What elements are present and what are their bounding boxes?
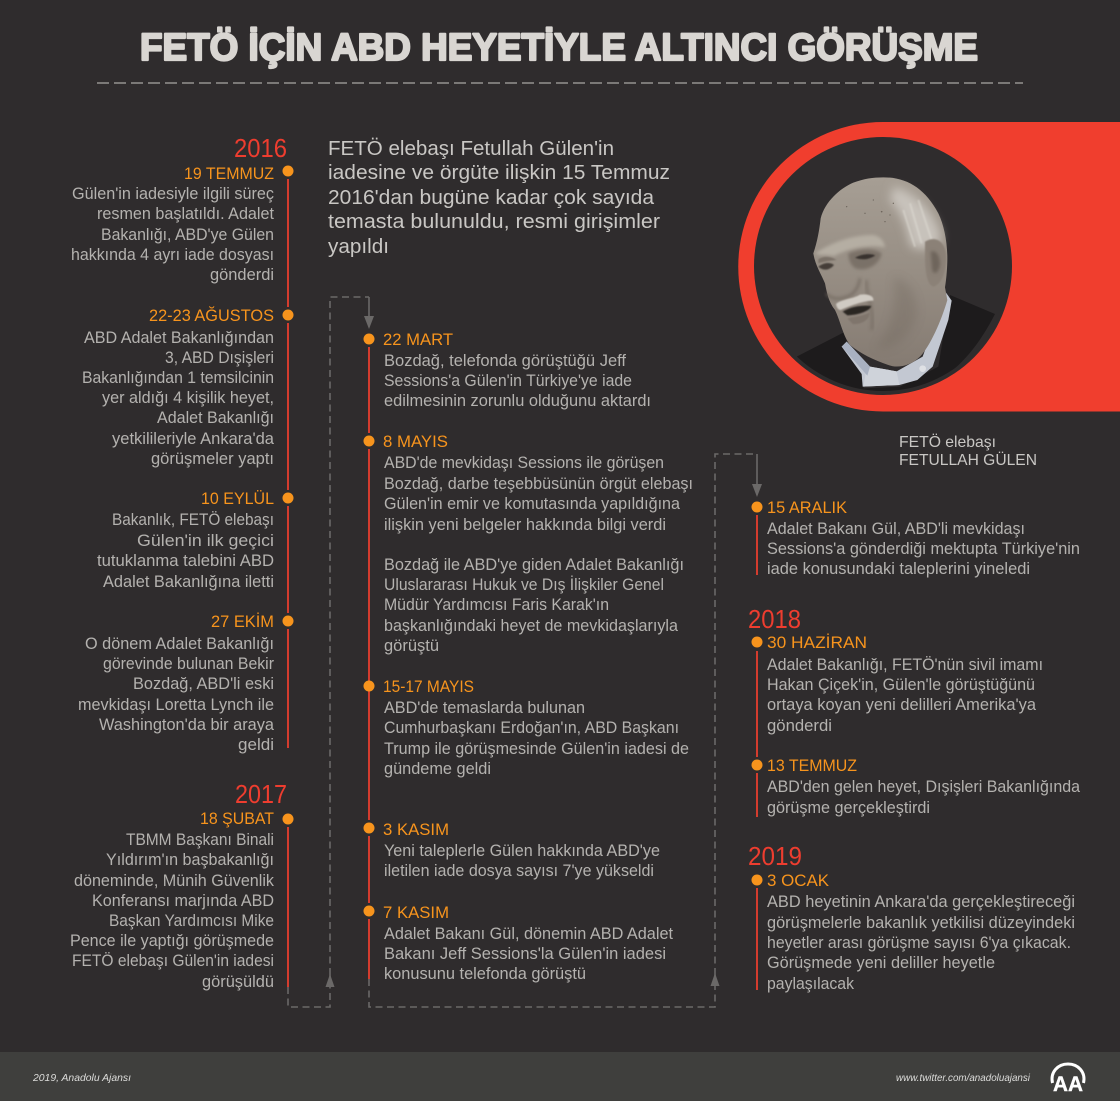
event: 3 Kasım: Yeni taleplerle Gülen hakkında ABD'ye — [384, 842, 660, 860]
event: 15-17 Mayıs: gündeme geldi — [384, 760, 491, 778]
event: 27 Ekim: geldi — [238, 736, 274, 754]
year: 2017: 2017 — [235, 781, 287, 809]
event: 19 Temmuz: Gülen'in iadesiyle ilgili süreç — [72, 185, 274, 203]
event: 27 Ekim: Bozdağ, ABD'li eski — [133, 675, 274, 693]
event: 22-23 Ağustos: 22-23 AĞUSTOS — [149, 306, 274, 325]
event: 22 Mart: Bozdağ, telefonda görüştüğü Jeff — [384, 352, 626, 370]
event: 8 Mayıs: Gülen'in emir ve komutasında yapıldığına — [384, 495, 681, 513]
event: 8 Mayıs: görüştü — [384, 637, 439, 655]
event: 27 Ekim: O dönem Adalet Bakanlığı — [85, 635, 274, 653]
event: 8 Mayıs: Bozdağ, darbe teşebbüsünün örgüt elebaşı — [384, 475, 693, 493]
event: 8 Mayıs: Müdür Yardımcısı Faris Karak'ın — [384, 596, 609, 614]
event: 22-23 Ağustos: 3, ABD Dışişleri — [165, 349, 274, 367]
event: 10 Eylül: 10 EYLÜL — [201, 489, 274, 508]
event: 27 Ekim — [78, 612, 275, 754]
event: 27 Ekim: mevkidaşı Loretta Lynch ile — [78, 696, 274, 714]
event: 7 Kasım: 7 KASIM — [383, 903, 449, 922]
footer twitter address: www.twitter.com/anadoluajansi — [896, 1072, 1031, 1084]
caption: portrait name: FETULLAH GÜLEN — [899, 451, 1037, 469]
event: 15 Aralık: Sessions'a gönderdiği mektupta Türkiye'nin — [767, 540, 1080, 558]
event: 7 Kasım: konusunu telefonda görüştü — [384, 965, 586, 983]
event: 27 Ekim: 27 EKİM — [211, 612, 274, 631]
event: 7 Kasım — [383, 903, 673, 983]
event: 7 Kasım: Bakanı Jeff Sessions'la Gülen'in iadesi — [384, 945, 666, 963]
event: 8 Mayıs: Bozdağ ile ABD'ye giden Adalet Bakanlığı — [384, 556, 684, 574]
event: 18 Şubat: 18 ŞUBAT — [200, 809, 274, 828]
intro text: FETÖ elebaşı Fetullah Gülen'in — [328, 138, 614, 160]
event: 3 Ocak: paylaşılacak — [767, 975, 855, 993]
event: 22-23 Ağustos: Bakanlığından 1 temsilcinin — [82, 369, 274, 387]
event: 8 Mayıs: başkanlığındaki heyet de mevkidaşlarıyla — [384, 617, 679, 635]
event: 22-23 Ağustos: görüşmeler yaptı — [151, 450, 274, 468]
footer bar — [0, 1052, 1120, 1101]
event: 19 Temmuz — [71, 164, 274, 284]
event: 3 Kasım — [383, 820, 660, 880]
event: 18 Şubat: TBMM Başkanı Binali — [126, 831, 274, 849]
event: 15 Aralık — [767, 498, 1080, 578]
event: 10 Eylül — [97, 489, 274, 591]
event: 3 Kasım: 3 KASIM — [383, 820, 449, 839]
intro text: 2016'dan bugüne kadar çok sayıda — [328, 187, 655, 209]
event: 10 Eylül: Adalet Bakanlığına iletti — [103, 573, 274, 591]
icon: Anadolu Ajansı logo — [1052, 1064, 1084, 1096]
event: 3 Kasım: iletilen iade dosya sayısı 7'ye yükseldi — [384, 862, 654, 880]
intro text — [328, 138, 670, 258]
event: 8 Mayıs: 8 MAYIS — [383, 432, 448, 451]
timeline line: right column — [752, 502, 762, 990]
event: 19 Temmuz: 19 TEMMUZ — [184, 164, 274, 183]
event: 15-17 Mayıs: 15-17 MAYIS — [383, 677, 474, 696]
panel: red portrait banner — [738, 122, 1120, 412]
event: 18 Şubat: Yıldırım'ın başbakanlığı — [106, 851, 274, 869]
event: 13 Temmuz — [767, 756, 1081, 817]
event: 15 Aralık: iade konusundaki taleplerini yineledi — [767, 560, 1030, 578]
event: 30 Haziran: ortaya koyan yeni delilleri Amerika'ya — [767, 696, 1037, 714]
event: 15 Aralık: Adalet Bakanı Gül, ABD'li mevkidaşı — [767, 520, 1025, 538]
event: 10 Eylül: Bakanlık, FETÖ elebaşı — [112, 511, 274, 529]
event: 18 Şubat: Başkan Yardımcısı Mike — [109, 912, 274, 930]
event: 15-17 Mayıs: Trump ile görüşmesinde Gülen'in iadesi de — [384, 740, 689, 758]
event: 18 Şubat: Konferansı marjında ABD — [92, 892, 274, 910]
event: 8 Mayıs: ilişkin yeni belgeler hakkında bilgi verdi — [384, 516, 666, 534]
event: 18 Şubat: görüşüldü — [202, 973, 274, 991]
event: 27 Ekim: Washington'da bir araya — [99, 716, 275, 734]
event: 3 Ocak — [767, 871, 1075, 993]
event: 7 Kasım: Adalet Bakanı Gül, dönemin ABD Adalet — [384, 925, 673, 943]
event: 30 Haziran: gönderdi — [767, 717, 832, 735]
text block: right column, 2018 and 2019 — [748, 498, 1081, 993]
event: 13 Temmuz: görüşme gerçekleştirdi — [767, 799, 930, 817]
event: 30 Haziran: Hakan Çiçek'in, Gülen'le görüştüğünü — [767, 676, 1035, 694]
event: 15-17 Mayıs — [383, 677, 689, 778]
intro text: temasta bulunuldu, resmi girişimler — [328, 211, 660, 233]
event: 18 Şubat: döneminde, Münih Güvenlik — [74, 872, 275, 890]
event: 3 Ocak: ABD heyetinin Ankara'da gerçekleştireceği — [767, 893, 1075, 911]
intro text: yapıldı — [328, 236, 389, 258]
timeline line: middle column — [364, 334, 720, 1007]
event: 22-23 Ağustos: Adalet Bakanlığı — [157, 409, 274, 427]
event: 19 Temmuz: gönderdi — [210, 266, 274, 284]
event: 3 Ocak: heyetler arası görüşme sayısı 6'ya çıkacak. — [767, 934, 1071, 952]
text block: left column, 2016 and 2017 — [70, 135, 287, 991]
event: 22 Mart: 22 MART — [383, 330, 453, 349]
event: 15 Aralık: 15 ARALIK — [767, 498, 847, 517]
event: 3 Ocak: görüşmelerle bakanlık yetkilisi düzeyindeki — [767, 914, 1075, 932]
year: 2019: 2019 — [748, 843, 802, 871]
event: 3 Ocak: 3 OCAK — [767, 871, 829, 890]
year: 2018: 2018 — [748, 606, 801, 634]
event: 22-23 Ağustos — [82, 306, 275, 468]
caption: portrait name: FETÖ elebaşı — [899, 433, 996, 451]
event: 10 Eylül: tutuklanma talebini ABD — [97, 552, 274, 570]
intro text: iadesine ve örgüte ilişkin 15 Temmuz — [328, 162, 670, 184]
footer credit: 2019, Anadolu Ajansı — [32, 1072, 131, 1084]
event: 19 Temmuz: resmen başlatıldı. Adalet — [97, 205, 274, 223]
event: 18 Şubat: Pence ile yaptığı görüşmede — [70, 932, 274, 950]
caption: portrait name — [899, 433, 1037, 469]
event: 22-23 Ağustos: ABD Adalet Bakanlığından — [84, 329, 274, 347]
event: 18 Şubat — [70, 809, 275, 991]
event: 13 Temmuz: ABD'den gelen heyet, Dışişleri Bakanlığında — [767, 778, 1081, 796]
event: 19 Temmuz: hakkında 4 ayrı iade dosyası — [71, 246, 274, 264]
event: 22 Mart: edilmesinin zorunlu olduğunu aktardı — [384, 392, 651, 410]
event: 3 Ocak: Görüşmede yeni deliller heyetle — [767, 954, 995, 972]
event: 8 Mayıs — [383, 432, 693, 655]
event: 19 Temmuz: Bakanlığı, ABD'ye Gülen — [101, 226, 274, 244]
event: 30 Haziran — [767, 633, 1043, 735]
event: 8 Mayıs: Uluslararası Hukuk ve Dış İlişkiler Genel — [384, 575, 664, 594]
event: 30 Haziran: Adalet Bakanlığı, FETÖ'nün sivil imamı — [767, 656, 1043, 674]
event: 22 Mart — [383, 330, 651, 410]
event: 22-23 Ağustos: yer aldığı 4 kişilik heyet, — [102, 389, 274, 407]
portrait: Fetullah Gülen — [797, 177, 995, 395]
year: 2016: 2016 — [234, 135, 287, 163]
event: 15-17 Mayıs: ABD'de temaslarda bulunan — [384, 699, 585, 717]
event: 8 Mayıs: ABD'de mevkidaşı Sessions ile görüşen — [384, 454, 664, 472]
event: 13 Temmuz: 13 TEMMUZ — [767, 756, 857, 775]
timeline line: left column — [282, 166, 334, 1007]
event: 22 Mart: Sessions'a Gülen'in Türkiye'ye iade — [384, 372, 632, 390]
connector arrow: left column to middle column — [330, 297, 374, 975]
title: FETÖ İÇİN ABD HEYETİYLE ALTINCI GÖRÜŞME — [140, 26, 978, 69]
event: 15-17 Mayıs: Cumhurbaşkanı Erdoğan'ın, ABD Başkanı — [384, 719, 679, 737]
connector arrow: middle column to right column — [715, 454, 762, 975]
event: 18 Şubat: FETÖ elebaşı Gülen'in iadesi — [72, 952, 274, 970]
event: 27 Ekim: görevinde bulunan Bekir — [103, 655, 275, 673]
event: 10 Eylül: Gülen'in ilk geçici — [137, 532, 274, 550]
text block: middle column, 2017 events — [383, 330, 693, 983]
icon: Anadolu Ajansı logo: AA — [1053, 1073, 1083, 1096]
event: 22-23 Ağustos: yetkilileriyle Ankara'da — [112, 430, 275, 448]
event: 30 Haziran: 30 HAZİRAN — [767, 633, 867, 652]
